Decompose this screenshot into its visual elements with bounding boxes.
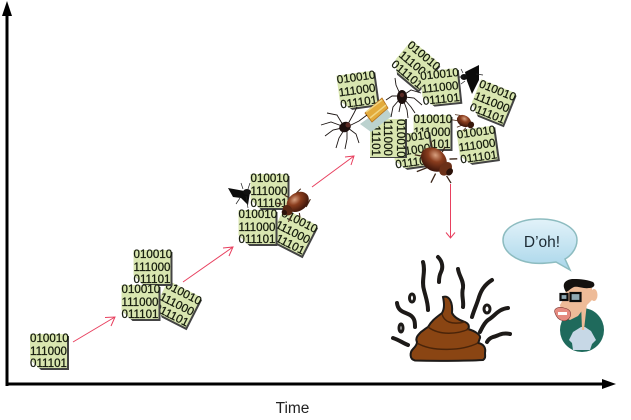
arrow: step 1 bbox=[73, 317, 115, 342]
document: upper left bbox=[336, 68, 380, 111]
badge circle bbox=[560, 308, 604, 352]
document group with bugs: fourth release bbox=[321, 39, 518, 193]
document: lower centre: 111000 bbox=[393, 141, 431, 160]
document: upper middle: 011101 bbox=[422, 91, 460, 108]
document: front: 010010 bbox=[122, 283, 160, 296]
glasses bbox=[560, 293, 580, 301]
document: upper left: 011101 bbox=[340, 93, 378, 111]
document: upper right: 111000 bbox=[472, 90, 511, 115]
stink lines bbox=[393, 257, 510, 345]
arrow: step 3 bbox=[312, 156, 354, 187]
document: sideways: 011101 bbox=[369, 119, 382, 156]
document: first release: 111000 bbox=[30, 345, 67, 358]
document: lower centre: 011101 bbox=[395, 153, 433, 171]
document: upper tilted: 011101 bbox=[389, 58, 425, 91]
lips bbox=[555, 307, 571, 321]
document: rotated bbox=[152, 279, 204, 330]
document: upper left: 010010 bbox=[336, 68, 376, 87]
document: first release bbox=[30, 332, 69, 370]
document: upper tilted bbox=[389, 39, 443, 93]
speech bubble bbox=[503, 219, 577, 270]
icon: nerd character bbox=[555, 279, 604, 352]
document: sideways: 010010 bbox=[394, 119, 407, 158]
document: upper middle bbox=[420, 66, 462, 108]
document group: second release bbox=[122, 248, 204, 330]
document: sideways: 111000 bbox=[381, 119, 394, 156]
icon: fly bbox=[228, 183, 251, 208]
document: lower right: 111000 bbox=[458, 136, 496, 155]
document: lower right bbox=[456, 123, 500, 166]
horizontal axis bbox=[6, 379, 616, 389]
document: upper right: 011101 bbox=[468, 101, 507, 127]
document: centre bbox=[414, 113, 452, 151]
arrow: down to result bbox=[446, 184, 455, 238]
document: front bbox=[238, 208, 278, 246]
document: rotated bbox=[268, 207, 320, 258]
document: top: 111000 bbox=[250, 185, 287, 198]
face bbox=[560, 285, 592, 320]
icon: beetle bbox=[274, 184, 316, 225]
axis label: Time: Time bbox=[276, 400, 309, 417]
stink bubbles bbox=[399, 294, 490, 332]
document: upper right: 010010 bbox=[477, 77, 518, 104]
document: front bbox=[122, 283, 160, 321]
document: top: 011101 bbox=[250, 197, 287, 210]
document: top bbox=[250, 172, 290, 210]
icon: spider left bbox=[321, 107, 367, 149]
document: first release: 010010 bbox=[30, 332, 69, 345]
document: centre: 011101 bbox=[414, 138, 450, 151]
document: rotated: 111000 bbox=[157, 290, 196, 319]
document group with bugs: third release bbox=[228, 172, 320, 258]
document: lower centre: 010010 bbox=[391, 128, 431, 147]
icon: spider right bbox=[386, 78, 422, 118]
document: rotated: 010010 bbox=[163, 279, 204, 308]
document: first release: 011101 bbox=[30, 357, 67, 370]
shirt bbox=[569, 327, 596, 350]
document: lower right: 011101 bbox=[460, 148, 498, 166]
icon: microchip bbox=[360, 98, 392, 132]
document: upper left: 111000 bbox=[338, 81, 376, 100]
document: centre: 010010 bbox=[414, 113, 452, 126]
document: top: 011101 bbox=[134, 273, 170, 286]
icon: fly upper right bbox=[459, 65, 483, 94]
document: rotated: 011101 bbox=[152, 301, 191, 329]
document: front: 011101 bbox=[122, 308, 158, 321]
document: sideways bbox=[369, 119, 407, 158]
icon: steaming poop pile bbox=[393, 257, 510, 361]
document: upper middle: 010010 bbox=[420, 66, 459, 83]
document: top bbox=[134, 248, 172, 286]
icon: large beetle bbox=[407, 135, 466, 193]
document: upper right bbox=[468, 77, 518, 127]
document: rotated: 011101 bbox=[268, 229, 307, 257]
document: rotated: 010010 bbox=[279, 207, 320, 236]
hair bbox=[564, 279, 594, 292]
document: top: 010010 bbox=[250, 172, 289, 185]
document: rotated: 111000 bbox=[273, 218, 312, 247]
vertical axis bbox=[2, 1, 12, 386]
poop body bbox=[411, 297, 485, 361]
neck bbox=[581, 303, 587, 330]
document: centre: 111000 bbox=[414, 126, 450, 139]
ear bbox=[590, 289, 598, 301]
speech text: D’oh! bbox=[524, 234, 560, 251]
document: lower centre bbox=[391, 128, 435, 171]
document: upper tilted: 111000 bbox=[396, 49, 433, 82]
document: front: 111000 bbox=[122, 296, 158, 309]
teeth bbox=[558, 312, 567, 315]
document: lower right: 010010 bbox=[456, 123, 496, 142]
document: upper middle: 111000 bbox=[421, 79, 459, 96]
poop folds bbox=[417, 314, 478, 349]
document: top: 010010 bbox=[134, 248, 172, 261]
icon: small beetle bbox=[450, 111, 476, 134]
document: front: 011101 bbox=[238, 233, 275, 246]
arrow: step 2 bbox=[183, 247, 233, 282]
document: upper tilted: 010010 bbox=[405, 39, 443, 73]
document: top: 111000 bbox=[134, 261, 170, 274]
document: front: 010010 bbox=[238, 208, 277, 221]
document: front: 111000 bbox=[238, 221, 275, 234]
